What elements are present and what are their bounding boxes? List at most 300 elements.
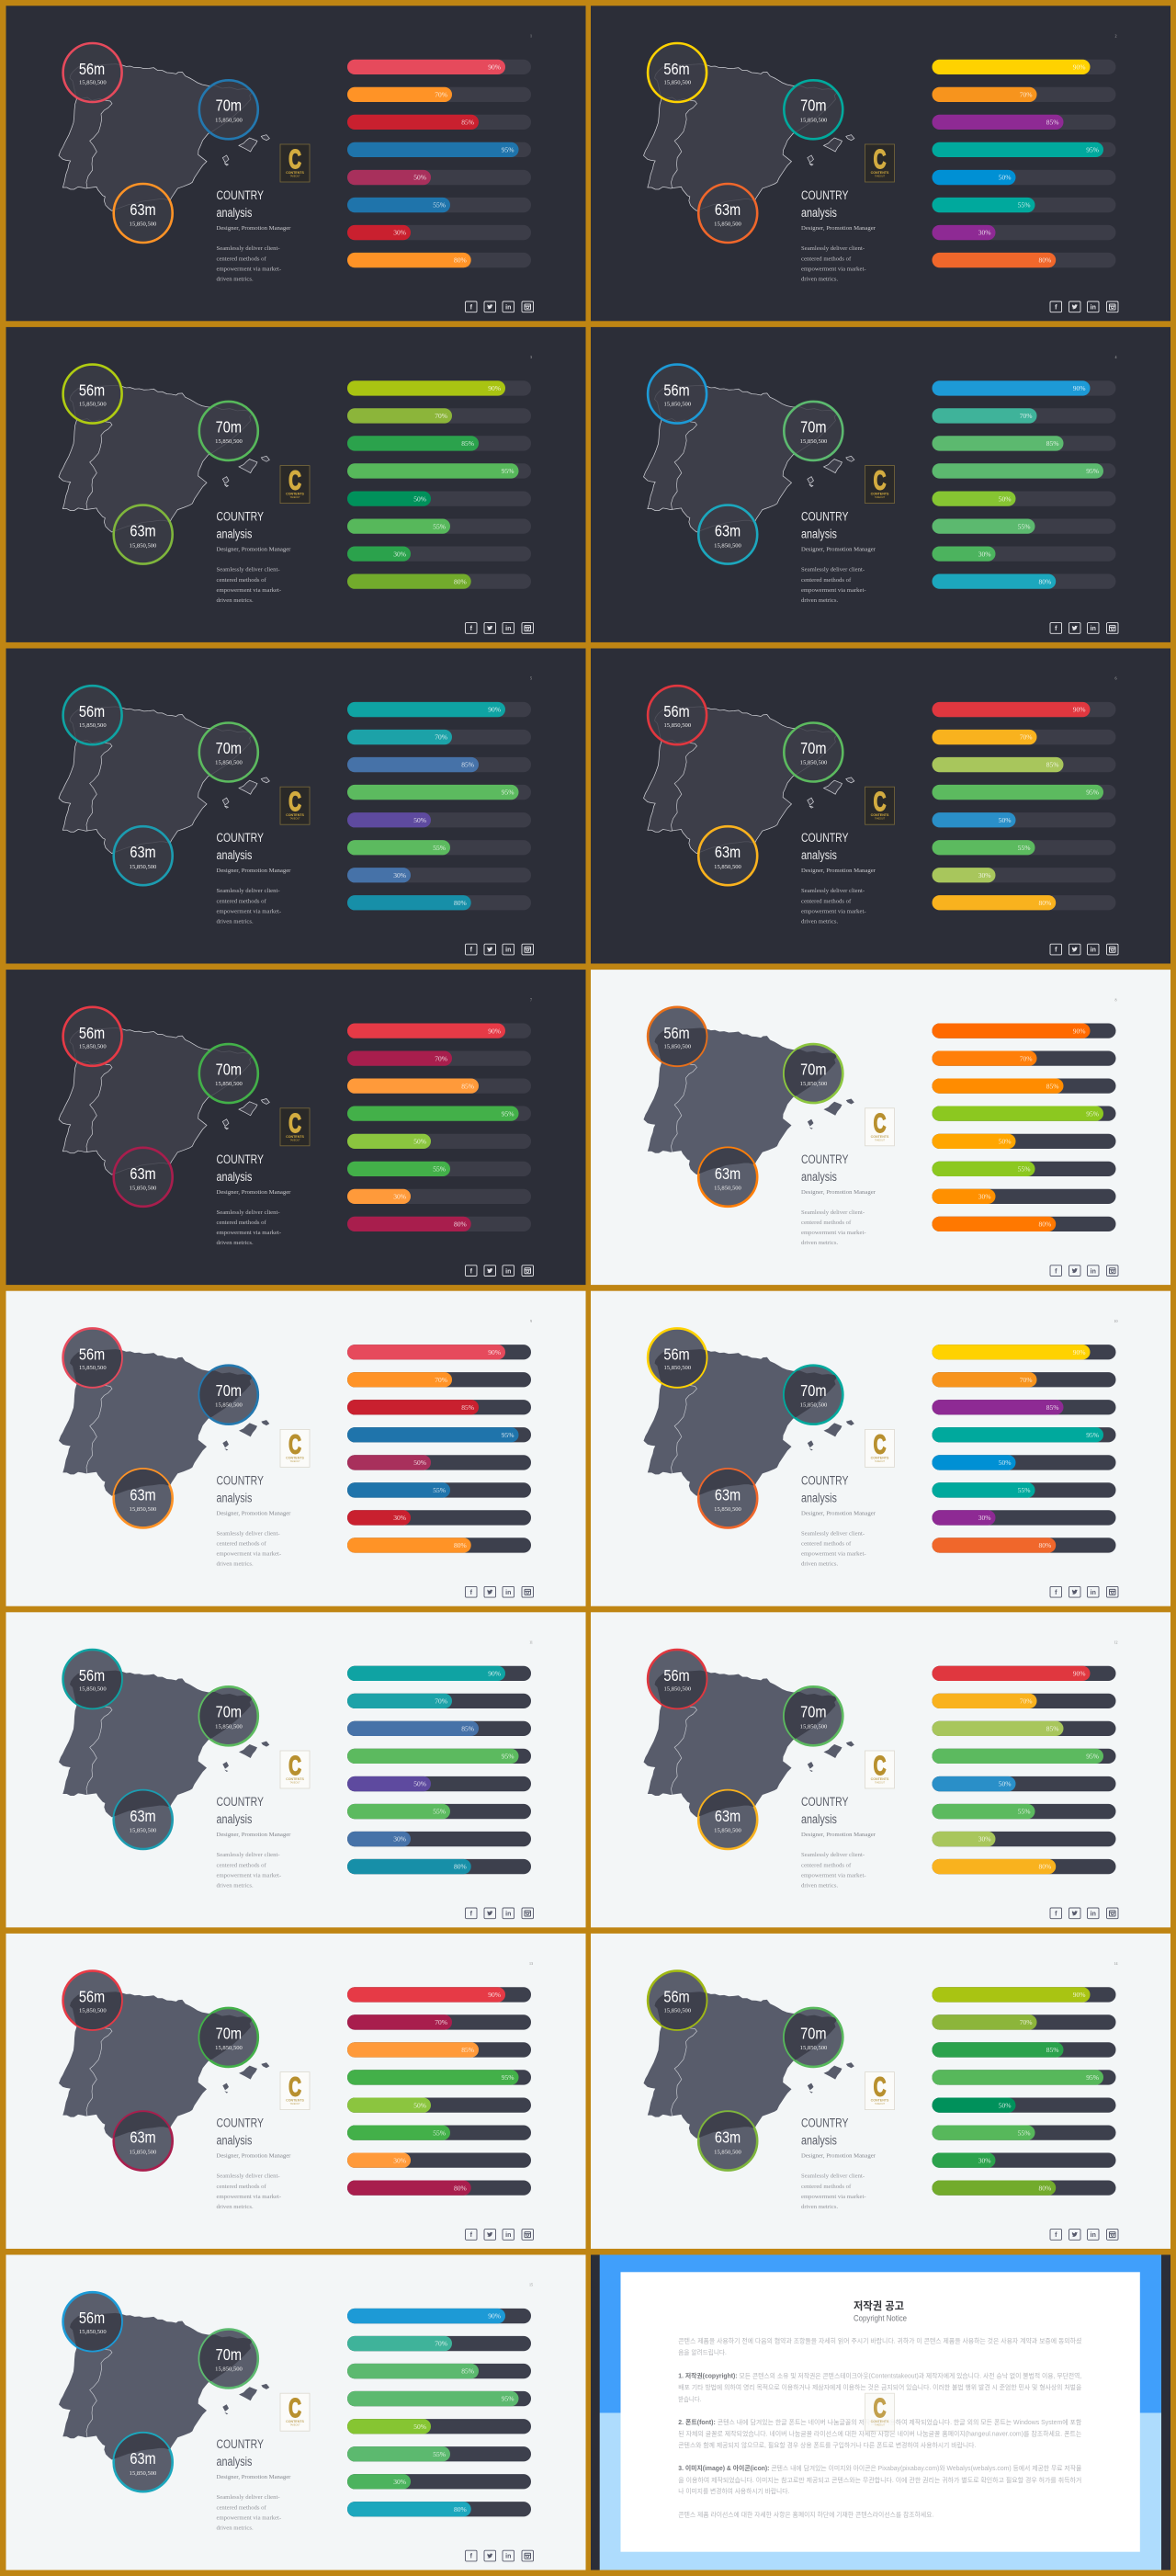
heading: copyright title: 저작권 공고	[854, 2299, 904, 2312]
map: Iberia outline	[643, 64, 854, 210]
icon: instagram	[522, 944, 533, 955]
circle: 56m: 56m	[79, 1988, 105, 2006]
logo: C	[874, 1752, 887, 1781]
text block: country analysis: empowerment via market-	[801, 266, 866, 272]
logo: TAKEOUT	[875, 2103, 886, 2105]
text block: country analysis: analysis	[217, 2133, 252, 2148]
bar 95%: 95%	[502, 145, 514, 153]
text block: country analysis: Designer, Promotion Manager	[217, 2153, 291, 2160]
bar 50%: 50%	[413, 2423, 426, 2431]
bar 90%: 90%	[1073, 706, 1086, 714]
icon: linkedin: in	[505, 1268, 511, 1275]
text block: country analysis: empowerment via market-	[801, 1230, 866, 1236]
circle: 63m	[698, 184, 757, 243]
text block: country analysis: analysis	[217, 206, 252, 220]
bar 95%	[347, 1749, 531, 1764]
text block: country analysis: driven metrics.	[217, 1240, 254, 1246]
social icons	[465, 1908, 533, 1919]
text block: country analysis: Seamlessly deliver client-	[801, 1530, 865, 1537]
logo: C	[288, 145, 301, 175]
bar 50%: 50%	[413, 2101, 426, 2109]
bar 55%	[347, 2125, 531, 2140]
logo: CONTENTS	[871, 493, 889, 496]
bar 30%: 30%	[393, 1192, 406, 1200]
circle: 63m: 63m	[130, 2450, 156, 2468]
bar 85%	[347, 757, 531, 772]
bar 55%: 55%	[433, 2128, 446, 2137]
bar 85%: 85%	[1046, 1725, 1058, 1733]
bar 55%	[347, 1162, 531, 1176]
panel: light slide 15	[6, 2255, 586, 2570]
bar 85%	[347, 1400, 531, 1414]
text block: country analysis: COUNTRY	[801, 509, 848, 524]
circle: 70m: 15,850,500	[215, 759, 243, 766]
page number: 6	[1115, 676, 1117, 681]
circle: 56m: 15,850,500	[79, 722, 107, 729]
icon: instagram	[1106, 623, 1118, 633]
text block: country analysis: driven metrics.	[801, 597, 838, 604]
icon: linkedin: in	[505, 1912, 511, 1918]
logo	[280, 1429, 310, 1467]
text block: country analysis: Seamlessly deliver client-	[217, 2494, 280, 2501]
text block: country analysis: centered methods of	[801, 1541, 852, 1548]
bar 70%	[347, 2014, 531, 2030]
circle: 63m: 15,850,500	[714, 2149, 742, 2155]
bar 55%: 55%	[433, 1808, 446, 1816]
circle: 70m: 15,850,500	[215, 438, 243, 445]
circle: 70m	[198, 2007, 259, 2068]
circle: 70m: 70m	[800, 2025, 826, 2043]
bar chart	[932, 1987, 1115, 2196]
text block: country analysis: COUNTRY	[217, 831, 264, 845]
bar 85%: 85%	[461, 1403, 474, 1412]
bar 70%	[932, 87, 1115, 102]
bar 80%	[347, 2180, 531, 2196]
text block: country analysis	[801, 831, 876, 925]
circle: 63m: 15,850,500	[714, 1185, 742, 1191]
bar 55%: 55%	[1018, 1808, 1031, 1816]
logo: CONTENTS	[871, 1777, 889, 1781]
bar 80%: 80%	[1038, 899, 1051, 907]
bar 30%	[347, 2474, 531, 2489]
bar 55%: 55%	[1018, 522, 1031, 530]
logo	[865, 1751, 895, 1788]
bar 95%	[347, 1427, 531, 1442]
circle: 56m: 15,850,500	[79, 2329, 107, 2335]
bar 50%: 50%	[999, 1780, 1011, 1788]
panel: dark slide 7	[6, 970, 586, 1285]
bar 90%: 90%	[1073, 63, 1086, 72]
circle: 56m: 56m	[663, 1024, 690, 1042]
circle: 70m: 70m	[800, 1061, 826, 1079]
map: Iberia outline	[643, 385, 854, 532]
text block: country analysis: centered methods of	[217, 899, 266, 904]
bar 70%	[347, 408, 531, 424]
bar 95%	[347, 785, 531, 800]
logo: TAKEOUT	[289, 1782, 300, 1785]
text block: country analysis: Seamlessly deliver client-	[217, 1530, 280, 1537]
bar 85%: 85%	[461, 2367, 474, 2376]
bar 95%: 95%	[1086, 1431, 1099, 1439]
icon: twitter	[1069, 2230, 1080, 2240]
bar 85%	[932, 115, 1115, 130]
bar 55%	[347, 840, 531, 855]
logo: TAKEOUT	[875, 818, 886, 821]
bar 95%: 95%	[1086, 1109, 1099, 1118]
text block: country analysis: Seamlessly deliver client-	[217, 245, 280, 252]
text block: country analysis	[217, 831, 291, 925]
circle: 56m: 15,850,500	[663, 722, 692, 729]
bar 90%	[347, 2309, 531, 2323]
text block: country analysis: centered methods of	[801, 1220, 852, 1226]
text block: country analysis: Designer, Promotion Manager	[801, 868, 876, 874]
text block: country analysis: centered methods of	[217, 1862, 266, 1868]
page number: 1	[530, 34, 532, 39]
bar 80%: 80%	[1038, 1220, 1051, 1228]
bar 30%	[347, 1832, 531, 1846]
social icons	[1050, 301, 1118, 312]
panel: dark slide 2	[591, 6, 1170, 321]
circle: 56m: 15,850,500	[663, 1365, 692, 1371]
bar 55%: 55%	[433, 522, 446, 530]
bar 70%: 70%	[435, 2340, 447, 2348]
circle: 70m: 15,850,500	[800, 2045, 828, 2051]
bar 90%: 90%	[1073, 384, 1086, 392]
bar 80%: 80%	[454, 256, 467, 265]
text block: country analysis: analysis	[217, 1812, 252, 1826]
bar 30%	[347, 546, 531, 562]
bar 95%: 95%	[1086, 789, 1099, 797]
text block: country analysis: Designer, Promotion Manager	[217, 2474, 291, 2480]
circle: 70m: 70m	[800, 418, 826, 437]
circle: 70m	[198, 1364, 259, 1425]
logo: C	[288, 467, 301, 496]
panel: light slide 10	[591, 1291, 1170, 1606]
bar 85%	[932, 1400, 1115, 1414]
circle: 63m: 15,850,500	[130, 1185, 157, 1191]
logo: C	[874, 1109, 887, 1139]
panel: dark slide 4	[591, 327, 1170, 642]
social icons	[1050, 1586, 1118, 1597]
circle: 56m: 15,850,500	[79, 80, 107, 86]
bar 70%	[932, 1372, 1115, 1387]
circle: 56m: 15,850,500	[79, 1043, 107, 1050]
bar 85%	[932, 2042, 1115, 2058]
circle: 56m	[62, 2290, 123, 2353]
bar 70%	[932, 1051, 1115, 1066]
icon: instagram	[522, 1265, 533, 1276]
icon: facebook: f	[470, 1912, 473, 1918]
bar 55%: 55%	[1018, 2128, 1031, 2137]
circle: 56m: 56m	[663, 1988, 690, 2006]
circle: 70m	[784, 402, 842, 460]
icon: facebook: f	[470, 948, 473, 954]
text block: country analysis: Seamlessly deliver client-	[801, 245, 865, 252]
circle: 56m: 15,850,500	[79, 401, 107, 407]
circle: 56m: 15,850,500	[79, 2007, 107, 2014]
panel: light slide 11	[6, 1612, 586, 1927]
circle: 63m: 15,850,500	[130, 864, 157, 870]
bar 80%	[347, 1217, 531, 1231]
bar 50%: 50%	[999, 816, 1011, 824]
text block: country analysis: Seamlessly deliver client-	[801, 1209, 865, 1216]
icon: linkedin: in	[1091, 305, 1096, 312]
text block: country analysis: empowerment via market-	[217, 1230, 281, 1236]
text block: country analysis: centered methods of	[801, 255, 852, 262]
logo: C	[874, 2073, 887, 2103]
text block: country analysis: COUNTRY	[217, 509, 264, 524]
text block: copyright body: 나 이미지를 변경하여 사용하시기 바랍니다.	[678, 2487, 789, 2495]
bar 95%	[932, 1427, 1115, 1442]
circle: 56m: 15,850,500	[79, 1686, 107, 1693]
bar 70%: 70%	[435, 733, 447, 742]
bar 90%	[347, 1345, 531, 1359]
text block: country analysis: Designer, Promotion Manager	[801, 547, 876, 553]
bar 50%	[932, 170, 1115, 185]
logo: C	[288, 788, 301, 817]
text block: copyright body	[678, 2336, 1082, 2518]
icon: twitter	[484, 301, 496, 312]
map: Iberia silhouette	[59, 1992, 269, 2139]
text block: copyright body: 콘텐스 제품을 사용하기 전에 다음의 협약과 조항들을 자세히 읽어 주시기 바랍니다. 귀하가 이 콘텐스 제품을 사용하는 것은 사용자 계약과 보증에 동의하셨	[678, 2336, 1082, 2345]
circle: 56m: 56m	[663, 61, 690, 78]
text block: country analysis: Designer, Promotion Manager	[217, 225, 291, 232]
text block: country analysis: COUNTRY	[217, 2116, 264, 2130]
bar 85%: 85%	[1046, 761, 1058, 769]
circle: 70m: 15,850,500	[215, 1723, 243, 1730]
circle: 70m: 15,850,500	[215, 117, 243, 123]
bar 50%	[347, 812, 531, 827]
bar 85%: 85%	[1046, 1403, 1058, 1412]
bar chart	[347, 380, 531, 589]
bar 80%	[347, 1859, 531, 1874]
circle: 63m: 15,850,500	[714, 864, 742, 870]
icon: linkedin: in	[1091, 2232, 1096, 2239]
bar 95%	[932, 2070, 1115, 2085]
icon: linkedin: in	[505, 2232, 511, 2239]
page number: 15	[529, 2283, 533, 2287]
circle: 56m	[648, 686, 707, 744]
logo: TAKEOUT	[289, 1460, 300, 1463]
text block: country analysis: Designer, Promotion Manager	[801, 1510, 876, 1516]
bar 50%	[932, 2097, 1115, 2113]
text block: country analysis	[217, 2116, 291, 2210]
bar 90%	[347, 1987, 531, 2003]
icon: linkedin: in	[1091, 1912, 1096, 1918]
text block: country analysis: analysis	[801, 527, 837, 541]
circle: 63m	[114, 505, 173, 564]
bar chart	[347, 1024, 531, 1231]
bar 55%: 55%	[433, 1164, 446, 1173]
icon: facebook: f	[470, 1268, 473, 1275]
bar 70%: 70%	[1020, 412, 1033, 420]
page number: 13	[529, 1961, 533, 1966]
logo: TAKEOUT	[875, 1460, 886, 1463]
circle: 56m: 56m	[663, 1345, 690, 1364]
icon: twitter	[484, 2230, 496, 2240]
text block: country analysis: COUNTRY	[801, 831, 848, 845]
circle: 56m: 15,850,500	[663, 2007, 692, 2014]
circle: 70m: 70m	[216, 1061, 242, 1079]
logo: TAKEOUT	[289, 175, 300, 177]
text block: country analysis: empowerment via market-	[217, 266, 281, 272]
circle: 70m: 70m	[216, 1382, 242, 1400]
bar 80%: 80%	[454, 577, 467, 585]
circle: 63m: 63m	[715, 1808, 741, 1825]
bar 55%	[932, 2125, 1115, 2140]
circle: 56m	[62, 1649, 123, 1709]
map: Iberia silhouette	[643, 1027, 854, 1175]
bar 85%: 85%	[461, 119, 474, 127]
text block: country analysis: analysis	[801, 1169, 837, 1184]
bar 50%	[347, 1776, 531, 1791]
circle: 70m	[199, 80, 258, 139]
bar 70%	[932, 408, 1115, 424]
bar 55%	[347, 198, 531, 212]
circle: 63m: 63m	[715, 1486, 741, 1504]
text block: country analysis: Designer, Promotion Manager	[217, 1510, 291, 1516]
bar 50%	[347, 1455, 531, 1470]
bar 55%	[347, 1804, 531, 1819]
bar 30%: 30%	[978, 1514, 990, 1522]
map: Iberia silhouette	[643, 1992, 854, 2139]
bar 90%: 90%	[1073, 1991, 1086, 1999]
bar 85%: 85%	[461, 2046, 474, 2054]
bar 30%: 30%	[393, 2156, 406, 2164]
bar 85%	[932, 757, 1115, 772]
bar 80%: 80%	[454, 1863, 467, 1871]
map: Iberia outline	[59, 64, 269, 210]
logo: TAKEOUT	[289, 2424, 300, 2427]
circle: 70m: 70m	[800, 1703, 826, 1721]
bar 95%: 95%	[502, 789, 514, 797]
bar 95%	[347, 1106, 531, 1121]
text block: country analysis	[801, 1473, 876, 1568]
bar 50%	[932, 812, 1115, 827]
heading: copyright title	[854, 2299, 907, 2323]
bar 85%	[932, 436, 1115, 451]
bar 55%	[932, 840, 1115, 855]
bar 90%	[932, 60, 1115, 74]
logo: CONTENTS	[286, 1777, 304, 1781]
bar 50%: 50%	[413, 494, 426, 503]
circle: 63m: 15,850,500	[130, 2470, 157, 2477]
text block: country analysis: centered methods of	[801, 2184, 852, 2190]
icon: twitter	[484, 623, 496, 633]
logo: CONTENTS	[286, 493, 304, 496]
circle: 63m	[112, 1788, 174, 1851]
logo: CONTENTS	[286, 2420, 304, 2423]
bar 85%	[347, 2364, 531, 2378]
map: Iberia outline	[59, 1027, 269, 1175]
text block: country analysis: empowerment via market-	[801, 908, 866, 915]
text block: country analysis: empowerment via market-	[217, 2514, 281, 2522]
circle: 70m	[784, 80, 842, 139]
bar chart	[932, 702, 1115, 910]
text block: country analysis: Designer, Promotion Manager	[217, 1189, 291, 1196]
bar 50%	[932, 1776, 1115, 1791]
logo: C	[874, 145, 887, 175]
logo: CONTENTS	[871, 171, 889, 175]
text block: country analysis	[801, 188, 876, 282]
bar 95%: 95%	[1086, 2073, 1099, 2082]
bar 50%	[932, 1455, 1115, 1470]
bar 95%: 95%	[502, 467, 514, 475]
panel: dark slide 1	[6, 6, 586, 321]
circle: 63m: 63m	[130, 2128, 156, 2147]
circle: 63m	[114, 184, 173, 243]
text block: country analysis: empowerment via market-	[801, 587, 866, 594]
logo	[280, 787, 310, 824]
bar 85%	[347, 115, 531, 130]
logo	[280, 2393, 310, 2431]
text block: country analysis: empowerment via market-	[217, 908, 281, 915]
circle: 56m: 56m	[79, 703, 105, 721]
circle: 70m: 70m	[800, 96, 826, 115]
text block: country analysis: analysis	[217, 2455, 252, 2469]
bar 50%: 50%	[413, 816, 426, 824]
circle: 63m	[114, 1148, 173, 1207]
text block: country analysis	[217, 1795, 291, 1889]
bar 50%: 50%	[999, 1137, 1011, 1145]
page number: 7	[530, 997, 532, 1002]
text block: country analysis: Designer, Promotion Manager	[217, 868, 291, 874]
bar 70%	[932, 2014, 1115, 2030]
bar 80%: 80%	[454, 2505, 467, 2514]
logo: CONTENTS	[286, 1456, 304, 1459]
bar 55%	[932, 1482, 1115, 1498]
logo: CONTENTS	[871, 2420, 889, 2423]
icon: twitter	[484, 1265, 496, 1276]
circle: 56m	[63, 686, 122, 744]
bar 30%: 30%	[393, 1835, 406, 1844]
circle: 70m: 15,850,500	[800, 1402, 828, 1409]
logo	[865, 2393, 895, 2431]
bar 90%	[932, 380, 1115, 396]
text block: country analysis	[801, 509, 876, 604]
bar 80%: 80%	[454, 2184, 467, 2192]
panel: light slide 14	[591, 1934, 1170, 2249]
bar 30%: 30%	[978, 229, 990, 237]
bar 55%: 55%	[1018, 844, 1031, 852]
logo: CONTENTS	[286, 2099, 304, 2103]
bar 70%: 70%	[435, 412, 447, 420]
icon: twitter	[1069, 623, 1080, 633]
bar 50%	[347, 2419, 531, 2434]
circle: 70m: 70m	[216, 2346, 242, 2364]
bar 70%: 70%	[1020, 1697, 1033, 1706]
text block: country analysis: COUNTRY	[801, 1152, 848, 1166]
bar 30%	[932, 546, 1115, 562]
bar 90%	[932, 1987, 1115, 2003]
bar 90%: 90%	[1073, 1670, 1086, 1678]
bar 30%: 30%	[393, 550, 406, 558]
icon: instagram	[1106, 1586, 1118, 1597]
icon: instagram	[1106, 2230, 1118, 2240]
bar 95%	[347, 2070, 531, 2085]
logo: TAKEOUT	[875, 1782, 886, 1785]
text block: country analysis: Seamlessly deliver client-	[801, 2173, 865, 2180]
logo	[865, 1108, 895, 1146]
bar 90%	[347, 702, 531, 717]
bar 50%	[932, 1134, 1115, 1149]
social icons	[465, 944, 533, 955]
bar 85%	[347, 1721, 531, 1736]
circle: 70m: 70m	[216, 418, 242, 437]
icon: instagram	[522, 1908, 533, 1919]
text block: country analysis: centered methods of	[217, 255, 266, 262]
icon: twitter	[484, 2550, 496, 2561]
